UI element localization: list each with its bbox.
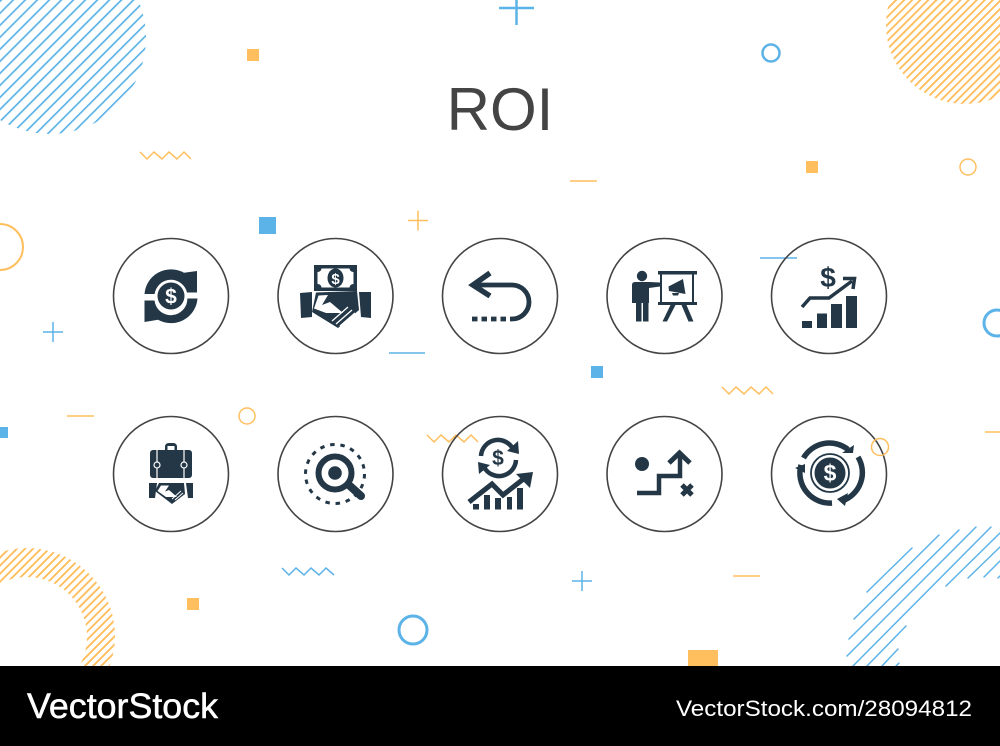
decoration: blue hatched circle top left <box>0 0 146 134</box>
decoration: orange ring over last circle <box>872 438 888 456</box>
icon: dollar cycle with rising chart: $ <box>492 447 504 470</box>
decoration: blue hatched lines bottom right <box>847 527 1000 666</box>
icon: dollar exchange arrows <box>144 269 198 323</box>
icon: growth chart with dollar: $ <box>820 262 836 293</box>
icon: presenter with megaphone board <box>632 271 697 322</box>
icon: money and handshake <box>300 265 371 328</box>
circle frames <box>114 238 886 532</box>
decoration: orange hatched circle top right <box>886 0 1000 104</box>
icon: return arrow <box>472 273 529 319</box>
icon: dollar cycle with rising chart <box>469 440 533 510</box>
icon: dollar exchange arrows: $ <box>165 286 177 308</box>
icon: dollar with circular arrows <box>795 443 862 506</box>
icon: dollar with circular arrows: $ <box>824 460 837 486</box>
icon: magnifier target <box>306 444 364 504</box>
footer logo text: VectorStock <box>27 687 219 726</box>
icon: briefcase with handshake <box>149 443 193 504</box>
footer image id: VectorStock.com/28094812 <box>676 696 972 721</box>
decoration: orange hatched ring bottom left <box>0 548 115 666</box>
icon: growth chart with dollar <box>802 262 857 328</box>
icon: money and handshake: $ <box>331 271 340 288</box>
title: ROI <box>447 76 553 143</box>
icon: steps with arrow and cross <box>635 453 692 495</box>
footer bar <box>0 666 1000 746</box>
